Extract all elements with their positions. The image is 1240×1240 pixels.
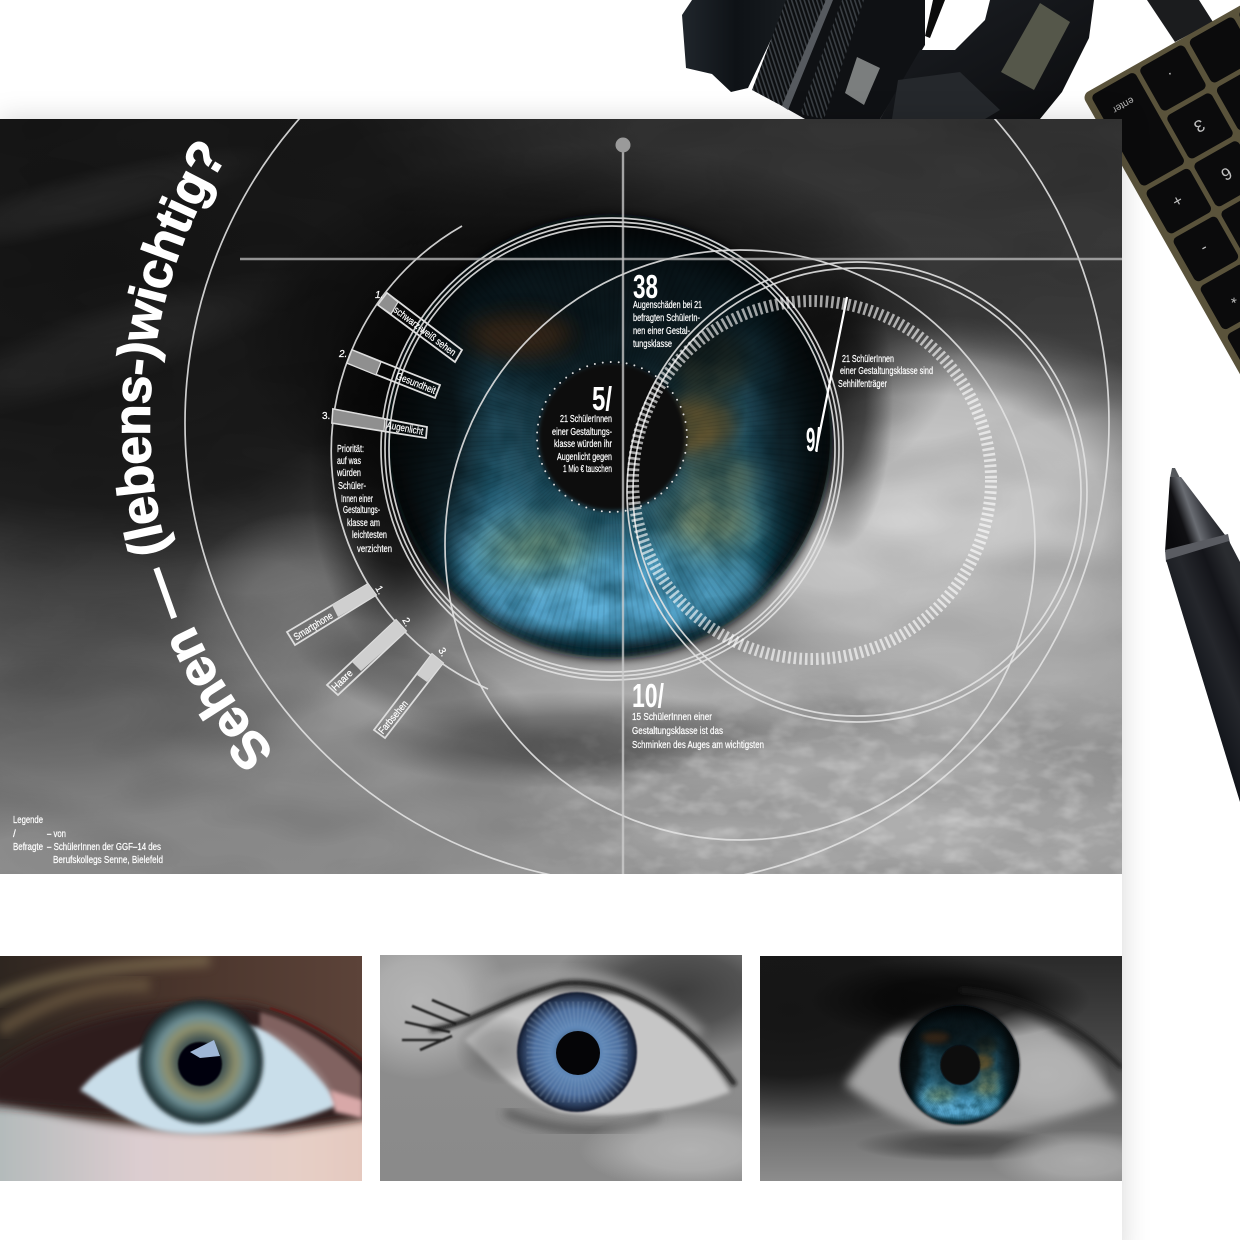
circles: triple ring around the iris — [381, 218, 843, 680]
bar 1 schwarz-weiß sehen: schwarz-weiß sehen — [391, 305, 458, 359]
circle: outer large ring — [184, 119, 1110, 874]
stat: 10 of 15: Gestaltungsklasse ist das — [632, 726, 723, 737]
circles: double ring on the right — [627, 262, 1087, 722]
text block: Priorität: Schüler- — [338, 481, 366, 492]
stat: 9 of 21: einer Gestaltungsklasse sind — [840, 366, 933, 377]
text block: Priorität: Priorität: — [337, 444, 364, 455]
icon: keyboard numeric block: . — [1166, 69, 1178, 85]
photo: colour eye — [0, 956, 362, 1181]
legend: Berufskollegs Senne, Bielefeld — [53, 855, 163, 866]
text block: Priorität: würden — [336, 468, 361, 479]
text block: Priorität: leichtesten — [352, 530, 387, 541]
stat: 5 of 21: 1 Mio € tauschen — [563, 464, 612, 475]
icon: keyboard numeric block — [1082, 0, 1240, 461]
bar Haare: Haare — [330, 668, 356, 693]
needle line of the tick ring — [816, 297, 847, 451]
bar Haare: 2. — [399, 616, 413, 629]
text block: Priorität — [336, 444, 392, 555]
stat: 38 eye defects — [633, 268, 702, 350]
pupil dotted ring — [537, 362, 687, 512]
legend: Legende — [13, 815, 43, 826]
legend: – SchülerInnen der GGF–14 des — [47, 842, 161, 853]
stat: 38 eye defects: tungsklasse — [633, 339, 672, 350]
bar Smartphone — [287, 584, 386, 645]
bar Smartphone: Smartphone — [292, 610, 335, 643]
arc carrying the priority bars — [331, 226, 488, 689]
text block: Priorität: auf was — [337, 456, 361, 467]
bar 3 Augenlicht: 3. — [322, 411, 330, 422]
stat: 9 of 21: 21 SchülerInnen — [842, 354, 894, 365]
stat: 9 of 21: 9/ — [806, 421, 820, 458]
bars: easiest to give up — [287, 584, 449, 738]
icon: stylus pen — [1165, 468, 1240, 802]
icon: camera strap — [1147, 0, 1213, 42]
axis end dot — [616, 138, 630, 152]
stat: 38 eye defects: befragten SchülerIn- — [633, 313, 700, 324]
stat: 9 of 21 — [806, 354, 933, 458]
title along the arc: Sehen — (lebens-)wichtig? — [116, 142, 270, 770]
bar Farbsehen: 3. — [435, 646, 449, 659]
stat: 5 of 21: einer Gestaltungs- — [552, 427, 612, 438]
icon: keyboard numeric block: enter — [1110, 94, 1136, 115]
icon: keyboard numeric block: - — [1198, 239, 1211, 257]
legend: / — [13, 829, 16, 840]
stat: 38 eye defects: 38 — [633, 268, 658, 305]
bar 3 Augenlicht: Augenlicht — [386, 420, 424, 438]
legend: – von — [47, 829, 66, 840]
bar 1 schwarz-weiß sehen — [375, 290, 462, 362]
infographic overlay: concentric circles — [184, 119, 1122, 874]
stat: 10 of 15 — [632, 677, 764, 751]
stat: 9 of 21: Sehhilfenträger — [838, 379, 887, 390]
bar Haare — [327, 616, 413, 695]
stat: 10 of 15: 15 SchülerInnen einer — [632, 712, 713, 723]
bar Farbsehen: Farbsehen — [377, 699, 411, 736]
circle: medium ring — [445, 250, 1035, 840]
text block: Priorität: verzichten — [357, 544, 392, 555]
stat: 5 of 21: 5/ — [592, 380, 612, 417]
tick ring — [633, 301, 991, 659]
bar 2 Gesundheit: 2. — [338, 349, 347, 360]
legend: Befragte — [13, 842, 43, 853]
icon: keyboard numeric block: * — [1225, 289, 1239, 307]
bar 3 Augenlicht — [322, 409, 427, 438]
icon: keyboard numeric block: + — [1169, 191, 1185, 210]
photo: same eye as main image — [760, 956, 1122, 1181]
legend — [13, 815, 163, 866]
photo: black and white eye with blue iris — [380, 955, 742, 1181]
stat: 5 of 21: 21 SchülerInnen — [560, 414, 612, 425]
stat: 10 of 15: Schminken des Auges am wichtigsten — [632, 740, 764, 751]
vertical axis line — [622, 145, 624, 874]
stat: 38 eye defects: nen einer Gestal- — [633, 326, 690, 337]
bar 1 schwarz-weiß sehen: 1. — [375, 290, 383, 301]
bar 2 Gesundheit: Gesundheit — [394, 371, 437, 397]
icon: keyboard numeric block: 6 — [1218, 163, 1235, 184]
stat: 5 of 21: klasse würden ihr — [554, 439, 612, 450]
bar 2 Gesundheit — [338, 349, 440, 398]
icon: keyboard numeric block: 3 — [1191, 115, 1208, 136]
icon: camera with lens — [682, 0, 1094, 119]
bar Farbsehen — [374, 646, 449, 738]
text block: Priorität: Gestaltungs- — [343, 505, 380, 516]
bar Smartphone: 1. — [372, 584, 386, 597]
bars: top priorities — [322, 290, 462, 438]
horizontal axis line — [240, 258, 1122, 260]
text block: Priorität: Innen einer — [341, 494, 373, 505]
stat: 5 of 21 — [552, 380, 612, 475]
stat: 38 eye defects: Augenschäden bei 21 — [633, 300, 702, 311]
stat: 10 of 15: 10/ — [632, 677, 664, 714]
text block: Priorität: klasse am — [347, 518, 380, 529]
stat: 5 of 21: Augenlicht gegen — [557, 452, 612, 463]
main eye photograph — [0, 119, 1122, 874]
